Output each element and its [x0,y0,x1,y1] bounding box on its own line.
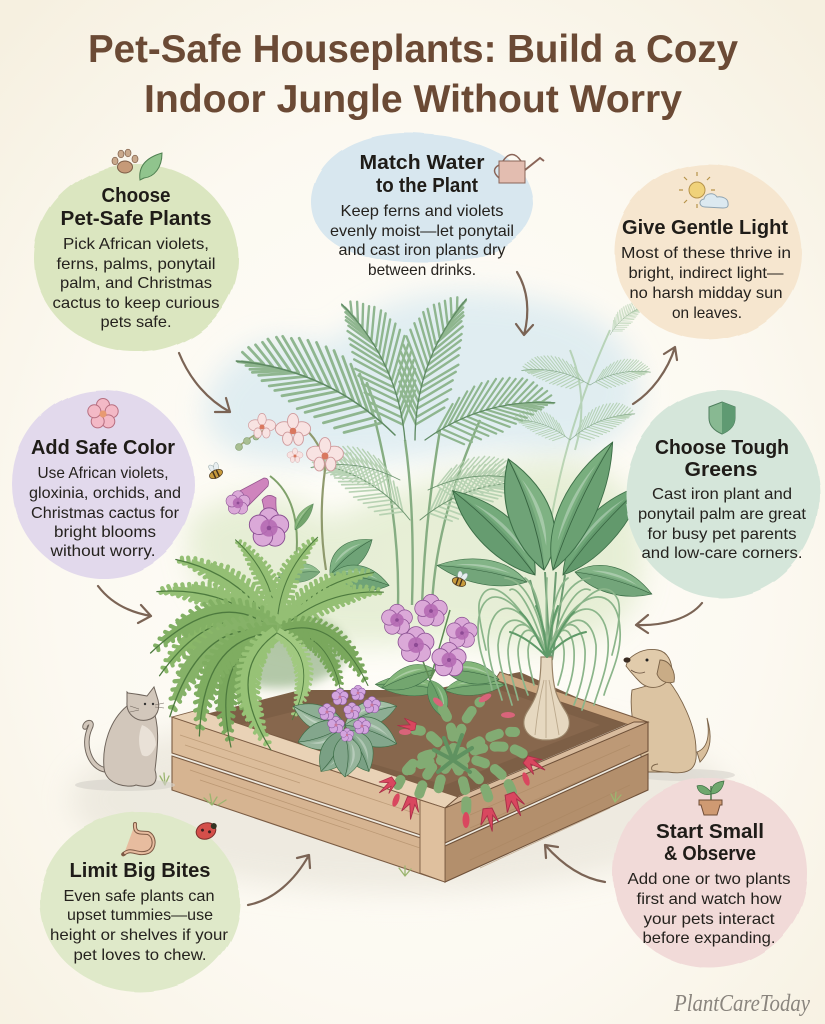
body text: no harsh midday sun [630,285,782,302]
body text: Even safe plants can [64,888,214,905]
plant: christmas cactus [374,692,549,832]
body text: Keep ferns and violets [340,203,504,220]
panel: choose pet-safe plants [34,149,238,352]
plant: boston fern [143,529,386,750]
heading [60,185,212,230]
heading [656,821,764,865]
body text [621,245,791,322]
body text: evenly moist—let ponytail [330,223,514,240]
plant: orchid [236,413,392,595]
cat [75,687,175,791]
bulb [524,657,569,740]
icon: shield [709,402,735,434]
bee left [205,461,224,481]
panel: match water [311,133,544,279]
body text: Pick African violets, [63,236,209,253]
body text [52,236,220,331]
icon: paw and leaf [112,149,162,180]
flower bell upper [226,478,268,514]
plant: violet gloxinia cluster [375,594,505,720]
body text: and low-care corners. [642,545,802,562]
heading: Choose Tough [655,437,789,459]
panel: limit big bites [40,812,240,992]
body text: pet loves to chew. [74,947,206,964]
body text: for busy pet parents [648,526,796,543]
body text [628,871,790,947]
body text [50,888,229,964]
arrow: pet-safe plants to planter [179,353,230,412]
plant: ponytail palm [478,578,620,740]
icon: potted seedling [697,781,724,815]
plant: african violet [288,685,402,780]
heading: Start Small [656,821,764,843]
heading [360,152,485,197]
body text: bright, indirect light— [628,265,784,282]
body text: upset tummies—use [67,907,213,924]
icon: sun and cloud [679,172,728,208]
heading: Greens [684,459,758,481]
plant: areca palm [228,284,559,605]
arrow: palms to light [633,347,677,404]
body text: and cast iron plants dry [338,242,506,259]
plant: pale bamboo palm [511,296,652,560]
arrow: safe color to fern [98,586,151,623]
heading: Give Gentle Light [622,217,788,239]
icon: watering can [494,154,544,183]
back rim [495,672,648,726]
body text: before expanding. [642,930,776,947]
heading: Add Safe Color [31,437,175,459]
body text: between drinks. [368,262,476,279]
illustration: back palms [228,284,652,605]
body text: Most of these thrive in [621,245,791,262]
body text: first and watch how [636,891,782,908]
body text: height or shelves if your [50,927,229,944]
heading: Limit Big Bites [70,860,210,882]
body text: Add one or two plants [628,871,790,888]
left side planks [172,717,445,843]
body text: bright blooms [54,524,156,541]
heading: Pet-Safe Plants [60,208,212,230]
heading: Choose [102,185,170,207]
body text: gloxinia, orchids, and [29,485,181,502]
flower bell lower [249,495,289,546]
body text [638,486,807,562]
body text: Christmas cactus for [31,505,180,522]
title: Pet-Safe Houseplants: Build a Cozy [88,28,738,71]
arrow: water to palms [516,272,533,335]
body text: pets safe. [100,314,172,331]
panel: tough greens [625,390,819,598]
soil [190,672,632,802]
plant: cast iron [435,433,656,660]
hair [478,578,620,710]
body text: Use African violets, [38,465,168,482]
arrow: limit bites to planter [248,855,310,905]
body text: your pets interact [644,911,775,928]
watercolor wash behind plants [70,291,730,892]
body text: without worry. [49,543,156,560]
panel: start small [613,778,807,968]
heading [655,437,789,481]
body text [29,465,181,560]
body text: ferns, palms, ponytail [56,256,216,273]
panel: gentle light [615,164,801,340]
body text: ponytail palm are great [638,506,807,523]
right side planks [445,722,648,843]
title: Indoor Jungle Without Worry [144,78,682,121]
bee center [451,569,470,588]
icon: stomach [123,824,154,854]
body text [330,203,514,279]
body text: on leaves. [672,305,742,322]
raised wooden planter [172,672,648,882]
heading: to the Plant [376,175,478,197]
dog [624,649,735,781]
icon: pink flower [88,398,118,428]
body text: palm, and Christmas [60,275,212,292]
body text: cactus to keep curious [52,295,220,312]
heading: Match Water [360,152,485,174]
panel: add safe color [12,390,194,578]
icon: ladybug [194,819,220,842]
arrow: tough greens to ponytail [636,603,702,633]
grass tufts [160,773,621,876]
heading: & Observe [664,843,756,865]
top rim [172,710,458,808]
body text: Cast iron plant and [652,486,792,503]
title [88,28,738,121]
arrow: start small to planter [545,845,605,882]
plant: gloxinia [226,476,317,560]
